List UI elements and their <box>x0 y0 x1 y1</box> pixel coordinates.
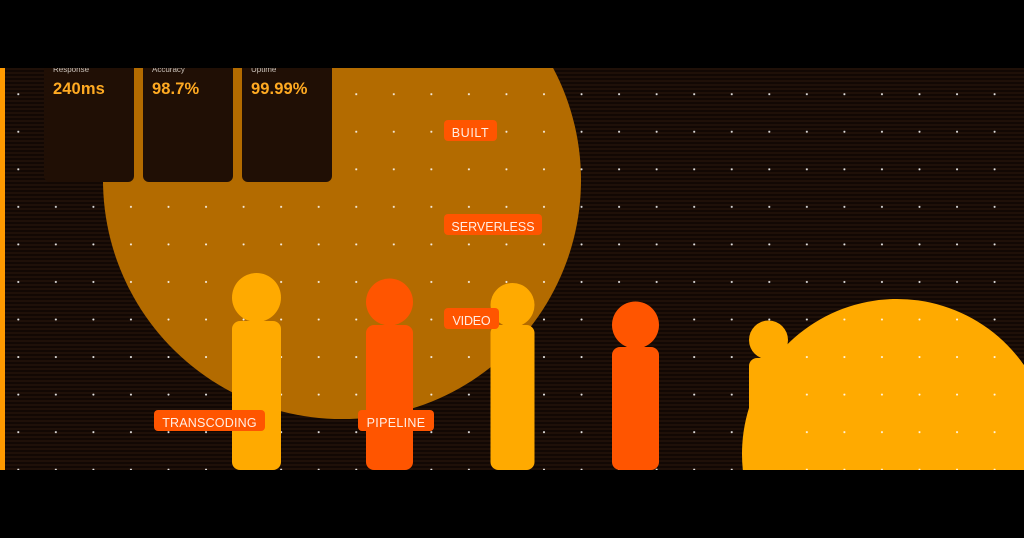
tag: built: BUILT <box>452 126 489 140</box>
tag: pipeline <box>358 410 434 431</box>
figure 4: orange <box>612 302 659 470</box>
tag: built <box>444 120 497 141</box>
tag: video <box>444 308 499 329</box>
tag: transcoding <box>154 410 265 431</box>
metric card: uptime <box>242 68 332 182</box>
tag: pipeline: PIPELINE <box>367 416 425 430</box>
left accent bar <box>0 68 5 470</box>
large amber circle <box>103 68 581 419</box>
infographic stage <box>0 68 1024 470</box>
metric card: response: 240ms <box>53 80 105 98</box>
metric card: accuracy <box>143 68 233 182</box>
metric card: uptime: 99.99% <box>251 80 308 98</box>
large yellow semicircle <box>742 299 1024 470</box>
tag: video: VIDEO <box>453 314 490 328</box>
figure 3: yellow <box>490 283 534 470</box>
figure 1: yellow <box>232 273 281 470</box>
dot grid <box>0 70 1024 470</box>
metric card: response <box>44 68 134 182</box>
tag: serverless: SERVERLESS <box>451 220 535 234</box>
tag: transcoding: TRANSCODING <box>162 416 257 430</box>
figure 2: orange <box>366 278 413 470</box>
figure 5: yellow <box>749 320 788 470</box>
tag: serverless <box>444 214 542 235</box>
metric card: accuracy: 98.7% <box>152 80 199 98</box>
